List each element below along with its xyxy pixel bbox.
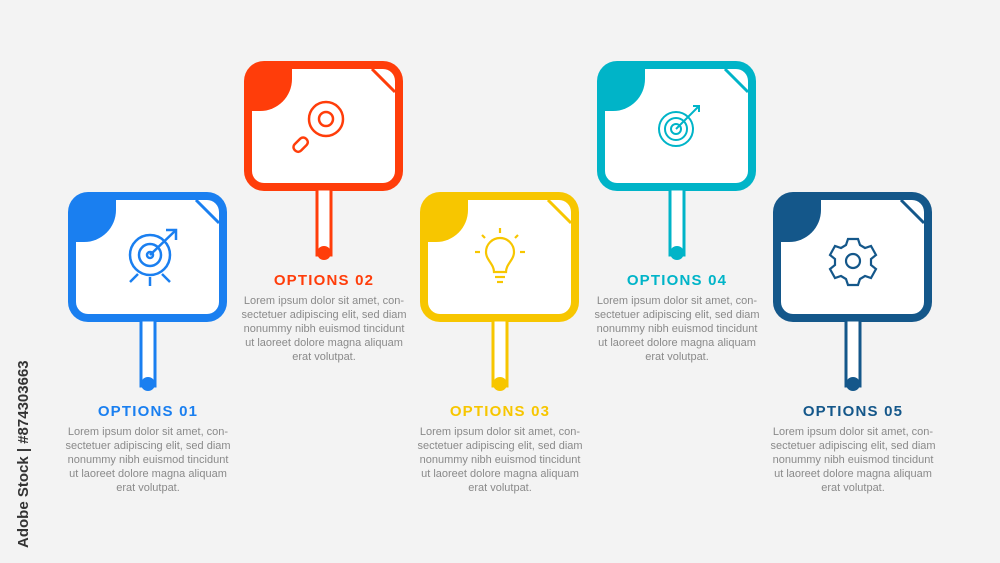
- text block 02: Lorem ipsum dolor sit amet, con-: [244, 295, 404, 307]
- text block 05: nonummy nibh euismod tincidunt: [773, 454, 933, 466]
- text block 05: Lorem ipsum dolor sit amet, con-: [773, 426, 933, 438]
- watermark: vertical text: Adobe Stock | #874303663: [15, 360, 32, 548]
- text block 02: ut laoreet dolore magna aliquam: [245, 337, 403, 349]
- icon: target with arrow: [130, 230, 176, 286]
- text block 03: nonummy nibh euismod tincidunt: [420, 454, 580, 466]
- panel: option 05: [773, 192, 932, 391]
- text block 01: sectetuer adipiscing elit, sed diam: [65, 440, 231, 452]
- icon: gear: [830, 239, 876, 285]
- icon: magnifier: [292, 102, 343, 153]
- text block 03: Lorem ipsum dolor sit amet, con-: [420, 426, 580, 438]
- text block 02: sectetuer adipiscing elit, sed diam: [241, 309, 407, 321]
- text block 04: Lorem ipsum dolor sit amet, con-: [597, 295, 757, 307]
- text block 01: nonummy nibh euismod tincidunt: [68, 454, 228, 466]
- text block 04: erat volutpat.: [645, 351, 709, 363]
- text block 03: erat volutpat.: [468, 482, 532, 494]
- text block 01: erat volutpat.: [116, 482, 180, 494]
- text block 03: sectetuer adipiscing elit, sed diam: [417, 440, 583, 452]
- text block 01: Lorem ipsum dolor sit amet, con-: [68, 426, 228, 438]
- text block 04: ut laoreet dolore magna aliquam: [598, 337, 756, 349]
- title: options 02: OPTIONS 02: [274, 272, 374, 289]
- icon: light bulb: [475, 228, 525, 282]
- text block 02: erat volutpat.: [292, 351, 356, 363]
- text block 05: erat volutpat.: [821, 482, 885, 494]
- panel: option 04: [597, 61, 756, 260]
- panel: option 02: [244, 61, 403, 260]
- text block 04: nonummy nibh euismod tincidunt: [597, 323, 757, 335]
- title: options 01: OPTIONS 01: [98, 403, 198, 420]
- icon: bullseye: [659, 106, 699, 146]
- text block 04: sectetuer adipiscing elit, sed diam: [594, 309, 760, 321]
- title: options 04: OPTIONS 04: [627, 272, 727, 289]
- text block 03: ut laoreet dolore magna aliquam: [421, 468, 579, 480]
- panel: option 03: [420, 192, 579, 391]
- text block 02: nonummy nibh euismod tincidunt: [244, 323, 404, 335]
- title: options 03: OPTIONS 03: [450, 403, 550, 420]
- title: options 05: OPTIONS 05: [803, 403, 903, 420]
- panel: option 01: [68, 192, 227, 391]
- text block 05: sectetuer adipiscing elit, sed diam: [770, 440, 936, 452]
- text block 05: ut laoreet dolore magna aliquam: [774, 468, 932, 480]
- text block 01: ut laoreet dolore magna aliquam: [69, 468, 227, 480]
